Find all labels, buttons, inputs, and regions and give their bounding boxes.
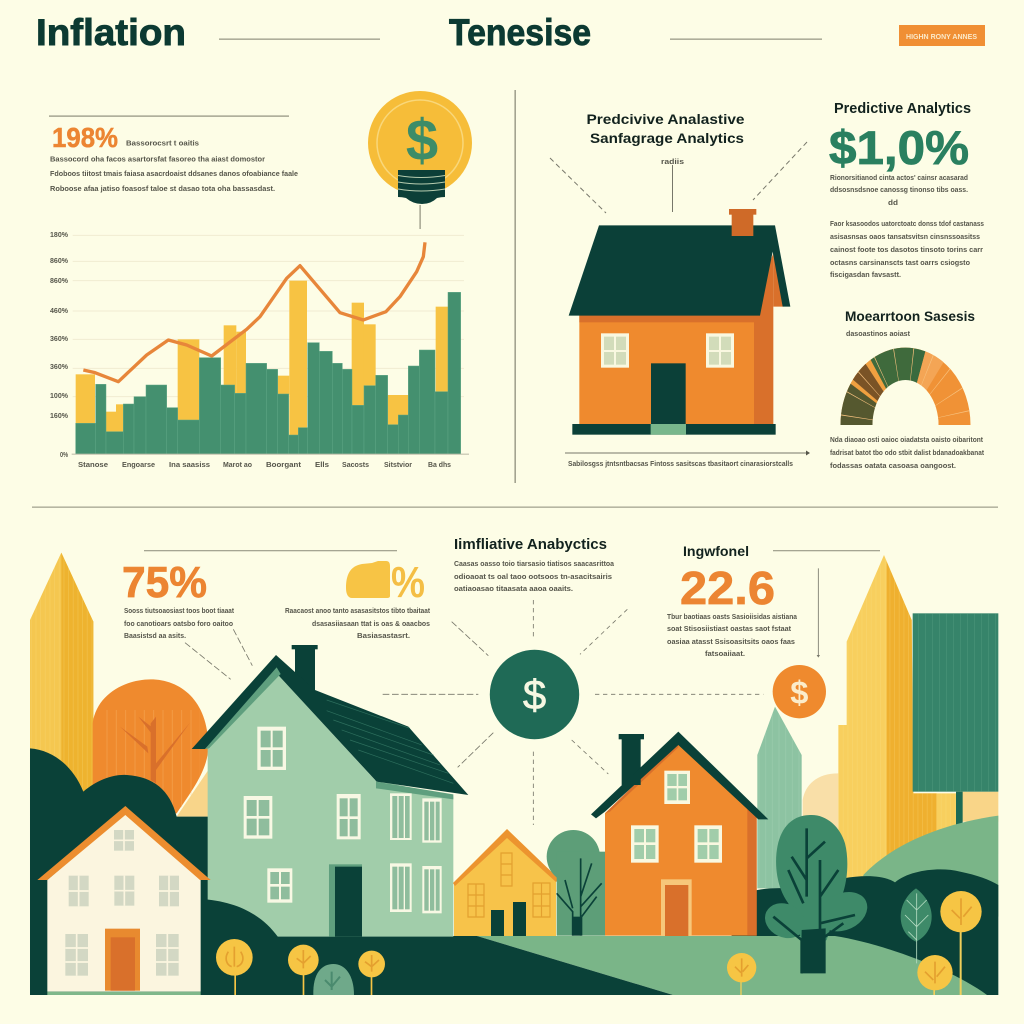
body copy: Faor ksasoodos uatorctoatc donss tdof castanass (830, 219, 984, 228)
heading: Moearrtoon Sasesis (845, 308, 975, 324)
text: Baasistsd aa asits. (124, 631, 186, 640)
green billboard (913, 613, 998, 875)
text: dsasasiiasaan ttat is oas & oaacbos (312, 619, 430, 628)
yellow tower (838, 555, 957, 883)
y axis labels (50, 230, 68, 459)
green bush tree (547, 830, 605, 936)
callout: 75% (122, 550, 397, 640)
text: foo canotioars oatsbo foro oaitoo (124, 619, 233, 628)
text: oatiaoasao titaasata aaoa oaaits. (454, 584, 573, 593)
small tag: radiis (661, 157, 684, 166)
stat caption: Bassorocsrt t oaitis (126, 138, 199, 148)
callout: inflative analytics (454, 537, 615, 593)
text: Sooss tiutsoaosiast toos boot tiaaat (124, 606, 234, 615)
panel: predictive analytics (829, 101, 984, 279)
stat description: Roboose afaa jatiso foasosf taloe st dasao tota oha bassasdast. (50, 184, 275, 193)
body copy: fiscigasdan favsastt. (830, 270, 901, 279)
heading (586, 111, 745, 146)
yellow round trees (727, 891, 982, 995)
heading: Predcivive Analastive (586, 111, 745, 127)
connector lines left (185, 622, 493, 767)
pale wedge (177, 770, 208, 817)
x axis labels: Ina saasiss (169, 460, 210, 469)
scene: yellow house (453, 829, 559, 936)
callout lines (550, 142, 807, 213)
text: odioaoat ts oal taoo ootsoos tn-asacitsairis (454, 572, 612, 581)
description: dd (888, 198, 898, 207)
green bars (76, 292, 461, 454)
body copy (830, 219, 984, 279)
heading: Iimfliative Anabyctics (454, 537, 607, 553)
dotted connector lines (533, 600, 763, 825)
bar and line chart (50, 230, 469, 469)
vertical arrow (817, 568, 820, 658)
text: Caasas oasso toio tiarsasio tiatisos saacasrittoa (454, 559, 615, 568)
x axis labels: Ba dhs (428, 460, 451, 469)
y axis labels: 460% (50, 306, 68, 315)
scene: right foreground (533, 568, 982, 995)
sub heading: dasoastinos aoiast (846, 329, 910, 338)
green dollar badge: $ (523, 671, 546, 718)
icon: orange house (569, 209, 790, 435)
heading: Ingwfonel (683, 543, 749, 559)
scene: yellow tower left (30, 553, 208, 995)
x axis labels: Marot ao (223, 460, 252, 469)
orange dollar badge (773, 665, 826, 718)
door (329, 864, 362, 937)
x axis labels: Sacosts (342, 460, 369, 469)
panel: chart stat (49, 116, 298, 193)
y axis labels: 860% (50, 256, 68, 265)
description (830, 173, 968, 207)
callout: yellow percent (285, 558, 430, 640)
orange header tag (899, 25, 985, 46)
ground (200, 936, 987, 995)
stat description: Bassocord oha facos asartorsfat fasoreo tha aiast domostor (50, 154, 265, 164)
y axis labels: 180% (50, 230, 68, 239)
y axis labels: 100% (50, 391, 68, 400)
y axis labels: 360% (50, 334, 68, 343)
big green tree (759, 815, 874, 973)
callout: 22.6 (667, 543, 880, 658)
stat 75%: 75% (122, 558, 207, 607)
axis caption: Sabilosgss jtntsntbacsas Fintoss sasitscas tbasitaort cinarasiorstcalls (568, 459, 793, 468)
icon: dollar coin light bulb: $ (406, 108, 438, 173)
x axis labels (78, 460, 451, 469)
x axis labels: Engoarse (122, 460, 155, 469)
panel: house analytics (550, 111, 810, 468)
y axis labels: 860% (50, 276, 68, 285)
stat $1,0%: $1,0% (829, 121, 969, 174)
gauge chart (856, 367, 954, 425)
leaf plant (901, 888, 932, 963)
gauge note: fadrisat batot tbo odo stbit dalist bdanadoakbanat (830, 448, 984, 457)
stat 22.6: 22.6 (680, 562, 775, 614)
arrow axis (565, 450, 810, 456)
orange dollar badge: $ (790, 673, 808, 710)
windows (244, 727, 442, 913)
stat description: Fdoboos tiitost tmais faiasa asacrdoaist ddsanes danos ofoabiance faale (50, 169, 298, 178)
x axis labels: Boorgant (266, 460, 302, 469)
y axis labels: 160% (50, 411, 68, 420)
text: Basiasastasrt. (357, 631, 410, 640)
heading: Predictive Analytics (834, 101, 971, 117)
body copy: asisasnsas oaos tansatsvitsn cinsnssoasitss (830, 232, 980, 241)
icon: gold blocks (346, 561, 390, 598)
text: Tbur baotiaas oasts Sasioiisidas aistiana (667, 612, 798, 621)
panel: gauge (845, 308, 975, 425)
orange house (591, 732, 768, 936)
gauge note: fodassas oatata casoasa oangoost. (830, 461, 956, 470)
gauge note: Nda diaoao osti oaioc oiadatsta oaisto oibaritont (830, 435, 983, 444)
title: Inflation: Inflation (36, 12, 186, 53)
dark foreground hill (200, 899, 520, 995)
percent sign: % (391, 558, 425, 607)
plot area (72, 235, 469, 455)
header bar (36, 12, 985, 53)
mint house (192, 645, 468, 937)
green hill (863, 816, 998, 917)
small round trees left (216, 939, 385, 995)
text (667, 612, 798, 658)
body copy: cainost foote tos dasotos tinsoto torins carr (830, 245, 983, 254)
peach sun (803, 773, 838, 887)
description: ddsosnsdsnoe canossg tinonso tibs oass. (830, 185, 968, 194)
text (454, 559, 615, 593)
stat description (50, 154, 298, 193)
yellow bars (76, 281, 448, 436)
y axis labels: 360% (50, 362, 68, 371)
body copy: octasns carsinanscts tast oarrs csiogsto (830, 258, 970, 267)
orange trend line (83, 242, 425, 382)
y axis labels: 0% (60, 450, 68, 459)
x axis labels: Ells (315, 460, 329, 469)
dark hills left (30, 748, 208, 995)
green dollar badge (490, 650, 579, 739)
description: Rionorsitianod cinta actos' cainsr acasarad (830, 173, 968, 182)
text: Raacaost anoo tanto asasasitstos tibto tbaitaat (285, 606, 430, 615)
icon: dollar coin light bulb (368, 91, 472, 229)
heading: Sanfagrage Analytics (590, 130, 744, 146)
x axis labels: Stanose (78, 460, 108, 469)
text: oasiaa atasst Ssisoasitsits oaos faas (667, 637, 795, 646)
dark hills (727, 869, 998, 995)
orange tree (93, 679, 208, 817)
gauge note (830, 435, 984, 470)
orange header tag: HIGHN RONY ANNES (906, 32, 977, 41)
mint tower (757, 707, 802, 888)
text (285, 606, 430, 640)
illustrated neighbourhood scene (30, 553, 998, 995)
text (124, 606, 234, 640)
stat 198%: 198% (52, 122, 118, 153)
scene: right background (727, 555, 998, 995)
cream house (30, 806, 211, 995)
title: Tenesise: Tenesise (449, 12, 591, 53)
text: soat Stisosiistiast oastas saot fstaat (667, 624, 791, 633)
x axis labels: Sitstvior (384, 460, 412, 469)
text: fatsoaiiaat. (705, 649, 745, 658)
